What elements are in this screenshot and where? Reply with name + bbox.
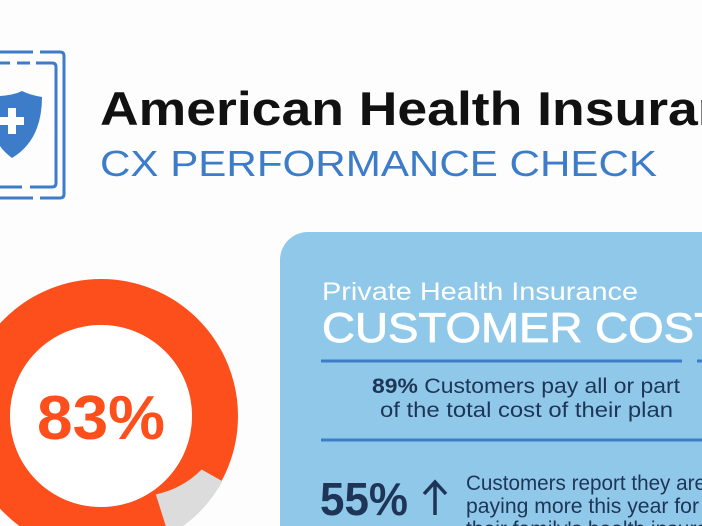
donut chart 83%	[0, 302, 222, 526]
donut chart 83%: 83%	[37, 384, 165, 453]
stat: 55%: 55%	[320, 473, 408, 525]
subtitle: CX PERFORMANCE CHECK	[100, 143, 657, 184]
panel: customer cost: CUSTOMER COST	[322, 304, 702, 351]
panel: customer cost: of the total cost of their plan	[380, 399, 673, 422]
stat: 89%: 89% Customers pay all or part	[372, 375, 680, 398]
icon: clipboard with shield	[0, 52, 64, 198]
panel: customer cost	[280, 232, 702, 526]
icon: up arrow	[424, 482, 446, 515]
panel heading: Private Health Insurance	[322, 278, 638, 306]
panel: customer cost: paying more this year for	[466, 495, 699, 518]
title: American Health Insurance	[100, 82, 702, 135]
